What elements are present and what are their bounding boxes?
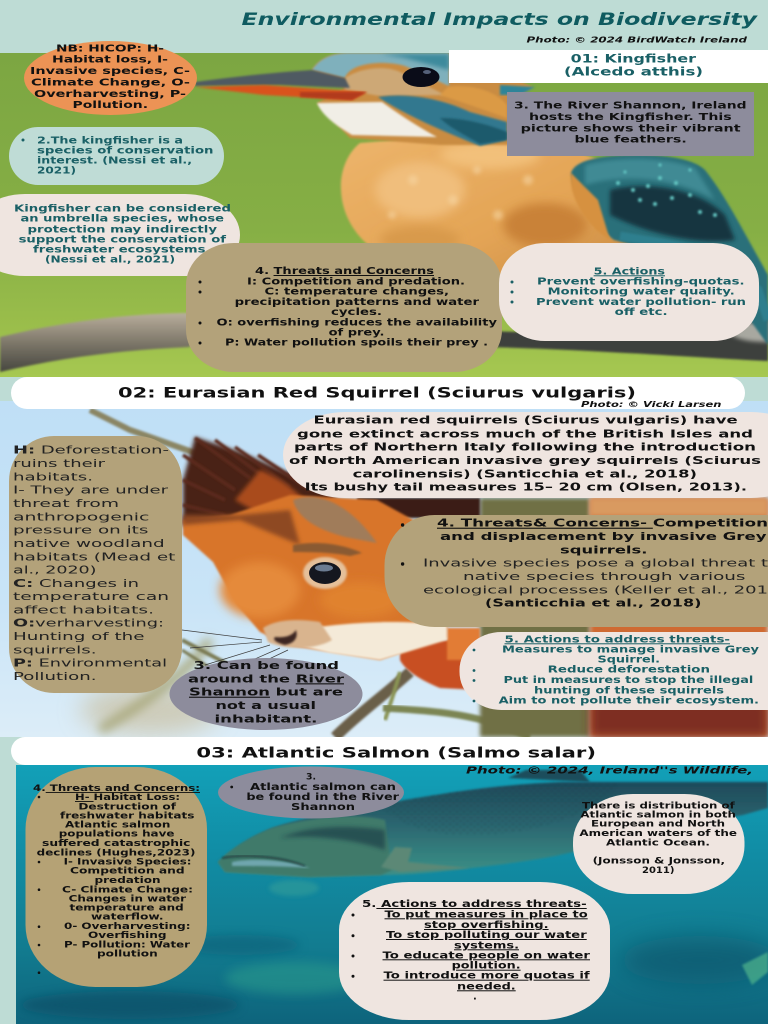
panel: River Shannon kingfisher: blue feathers. <box>574 135 687 146</box>
panel: squirrel threats and concerns: (Santicchia et al., 2018) <box>485 597 701 610</box>
panel: umbrella species <box>0 194 240 276</box>
panel: umbrella species: support the conservation of <box>19 235 227 246</box>
panel: umbrella species: protection may indirectly <box>28 224 218 235</box>
panel: kingfisher threats and concerns: of prey. <box>329 327 384 338</box>
panel: kingfisher conservation interest: species of conservation <box>37 145 214 156</box>
panel: squirrel threats and concerns: native species through various <box>463 570 746 583</box>
panel: salmon threats and concerns: temperature and <box>70 903 184 913</box>
heading: kingfisher: (Alcedo atthis) <box>564 64 703 78</box>
panel: squirrel threats and concerns: and displacement by invasive Grey <box>440 530 766 543</box>
heading: squirrel <box>11 377 745 409</box>
panel: salmon actions: To educate people on water <box>382 950 590 961</box>
panel: salmon threats and concerns: Atlantic salmon <box>65 821 170 831</box>
panel: River Shannon kingfisher: 3. The River Shannon, Ireland <box>514 101 746 112</box>
photo: kingfisher on branch <box>0 53 768 377</box>
panel: kingfisher threats and concerns: P: Water pollution spoils their prey . <box>225 338 488 349</box>
panel: kingfisher threats and concerns: cycles. <box>331 307 382 318</box>
panel: salmon actions: . <box>473 991 477 1002</box>
panel: salmon actions: To introduce more quotas if <box>384 971 591 982</box>
photo credit: kingfisher: Photo: © 2024 BirdWatch Ireland <box>526 36 747 45</box>
panel: squirrel extinction facts: Eurasian red squirrels (Sciurus vulgaris) have <box>314 414 738 427</box>
panel: squirrel HICOP list: threat from <box>13 497 119 510</box>
panel: salmon distribution: American waters of the <box>579 829 737 839</box>
photo: red squirrel <box>0 401 768 737</box>
panel: salmon actions <box>339 882 610 1020</box>
panel: kingfisher actions: 5. Actions <box>594 266 665 277</box>
panel: HICOP note: Overharvesting, P- <box>34 89 186 100</box>
panel: River Shannon kingfisher: picture shows their vibrant <box>521 124 741 135</box>
panel: salmon threats and concerns: waterflow. <box>91 913 164 923</box>
panel: salmon distribution: 2011) <box>642 866 674 876</box>
panel: squirrel actions: Put in measures to stop the illegal <box>504 675 753 686</box>
panel: salmon actions: stop overfishing. <box>424 920 549 931</box>
panel: squirrel HICOP list: P: Environmental <box>13 657 167 670</box>
panel: squirrel HICOP list: O: verharvesting: <box>13 617 164 630</box>
panel: squirrel HICOP list: al., 2020) <box>13 564 96 577</box>
panel: salmon threats and concerns: I- Invasive Species: <box>64 857 192 867</box>
panel: squirrel River Shannon: around the River <box>188 672 345 685</box>
panel: salmon threats and concerns: declines (Hughes,2023) <box>37 848 195 858</box>
panel: HICOP note: NB: HICOP: H- <box>56 44 164 55</box>
panel: salmon threats and concerns: Competition and <box>70 867 185 877</box>
panel: squirrel actions: Reduce deforestation <box>548 665 710 676</box>
panel: kingfisher threats and concerns: O: overfishing reduces the availability <box>216 317 498 328</box>
panel: salmon threats and concerns: C- Climate Change: <box>62 885 193 895</box>
panel: umbrella species: an umbrella species, whose <box>20 214 224 225</box>
panel: squirrel River Shannon <box>170 658 362 730</box>
panel: squirrel extinction facts: carolinensis) (Santicchia et al., 2018) <box>353 467 697 480</box>
panel: kingfisher threats and concerns: C: temperature changes, <box>264 287 449 298</box>
panel: kingfisher threats and concerns: I: Competition and predation. <box>247 276 465 287</box>
panel: squirrel HICOP list: temperature can <box>13 590 169 603</box>
panel: salmon threats and concerns <box>26 767 207 987</box>
photo: Atlantic salmon underwater <box>16 765 768 1024</box>
heading: squirrel: 02: Eurasian Red Squirrel (Sciurus vulgaris) <box>118 385 636 401</box>
panel: squirrel extinction facts: parts of Northern Italy following the introduction <box>294 441 756 454</box>
panel: salmon River Shannon: Shannon <box>291 802 355 813</box>
panel: umbrella species: freshwater ecosystems. <box>33 245 210 256</box>
panel: salmon River Shannon: 3. <box>306 772 316 782</box>
panel: kingfisher conservation interest: 2.The kingfisher is a <box>37 135 183 146</box>
panel: HICOP note: Climate Change, O- <box>31 78 190 89</box>
panel: kingfisher actions <box>499 243 759 341</box>
panel: salmon threats and concerns: predation <box>94 876 161 886</box>
panel: squirrel extinction facts: gone extinct across much of the British Isles and <box>297 427 753 440</box>
panel: squirrel HICOP list: H: Deforestation- <box>13 444 169 457</box>
panel: kingfisher actions: Prevent overfishing-quotas. <box>537 276 744 287</box>
panel: squirrel HICOP list: I- They are under <box>13 484 169 497</box>
panel: squirrel actions: hunting of these squirrels <box>534 685 724 696</box>
panel: squirrel extinction facts: of North American invasive grey squirrels (Sciurus <box>289 454 762 467</box>
panel: HICOP note: Pollution. <box>72 100 148 111</box>
panel: squirrel actions: Aim to not pollute their ecosystem. <box>499 695 759 706</box>
panel: squirrel HICOP list: squirrels. <box>13 643 96 656</box>
panel: salmon threats and concerns: populations have <box>59 830 174 840</box>
panel: kingfisher threats and concerns: precipitation patterns and water <box>235 297 479 308</box>
heading: kingfisher: 01: Kingfisher <box>571 51 696 65</box>
panel: squirrel HICOP list: pressure on its <box>13 524 149 537</box>
heading: salmon <box>11 737 768 765</box>
panel: salmon actions: needed. <box>457 981 516 992</box>
panel: squirrel River Shannon: Shannon but are <box>189 686 343 699</box>
panel: squirrel threats and concerns: Invasive species pose a global threat t <box>423 557 768 570</box>
panel: squirrel HICOP list <box>9 436 182 693</box>
panel: squirrel HICOP list: affect habitats. <box>13 603 154 616</box>
panel: kingfisher actions: Prevent water pollution- run <box>536 297 746 308</box>
panel: HICOP note <box>24 41 197 115</box>
panel: salmon threats and concerns: Changes in water <box>69 894 187 904</box>
panel: squirrel actions: 5. Actions to address threats- <box>504 634 730 645</box>
panel: salmon distribution: Atlantic Ocean. <box>606 838 710 848</box>
panel: River Shannon kingfisher: hosts the Kingfisher. This <box>529 112 732 123</box>
panel: salmon distribution: European and North <box>591 820 725 830</box>
panel: kingfisher actions: off etc. <box>615 307 668 318</box>
panel: squirrel threats and concerns: 4. Threats& Concerns- Competition <box>437 517 768 530</box>
panel: squirrel HICOP list: anthropogenic <box>13 510 149 523</box>
panel: salmon actions: To put measures in place to <box>384 909 588 920</box>
panel: kingfisher conservation interest: interest. (Nessi et al., <box>37 156 192 167</box>
panel: squirrel threats and concerns <box>384 515 768 627</box>
band behind squirrel heading <box>0 386 768 401</box>
panel: salmon distribution: There is distribution of <box>582 801 735 811</box>
title: Environmental Impacts on Biodiversity <box>242 10 758 30</box>
heading: kingfisher <box>449 50 768 83</box>
photo credit: salmon: Photo: © 2024, Ireland''s Wildlife, <box>466 765 753 776</box>
panel: squirrel HICOP list: Hunting of the <box>13 630 145 643</box>
panel: squirrel actions: Measures to manage invasive Grey <box>502 644 760 655</box>
panel: squirrel HICOP list: C: Changes in <box>13 577 139 590</box>
panel: salmon threats and concerns: P- Pollution: Water <box>64 940 191 950</box>
photo credit: squirrel: Photo: © Vicki Larsen <box>581 400 722 409</box>
panel: HICOP note: Habitat loss, I- <box>52 55 168 66</box>
panel: salmon threats and concerns: Overfishing <box>88 931 166 941</box>
panel: squirrel HICOP list: habitats (Mead et <box>13 550 177 563</box>
panel: squirrel HICOP list: Pollution. <box>13 670 96 683</box>
top band <box>0 0 768 53</box>
panel: squirrel actions <box>460 632 768 710</box>
panel: salmon threats and concerns: suffered catastrophic <box>42 839 190 849</box>
panel: squirrel River Shannon: inhabitant. <box>214 712 317 725</box>
panel: salmon threats and concerns: pollution <box>97 950 158 960</box>
panel: salmon actions: 5. Actions to address threats- <box>362 899 587 910</box>
panel: salmon actions: To stop polluting our water <box>386 930 587 941</box>
panel: squirrel extinction facts: Its bushy tail measures 15– 20 cm (Olsen, 2013). <box>305 481 747 494</box>
panel: salmon actions: pollution. <box>452 961 521 972</box>
panel: umbrella species: Kingfisher can be considered <box>14 204 231 215</box>
panel: salmon distribution <box>573 794 744 894</box>
panel: kingfisher threats and concerns <box>186 243 502 372</box>
panel: umbrella species: (Nessi et al., 2021) <box>45 255 175 266</box>
heading: salmon: 03: Atlantic Salmon (Salmo salar) <box>196 745 596 761</box>
panel: salmon River Shannon: Atlantic salmon can <box>250 782 396 793</box>
panel: salmon threats and concerns: 0- Overharvesting: <box>64 922 190 932</box>
panel: kingfisher threats and concerns: 4. Threats and Concerns <box>255 266 434 277</box>
panel: HICOP note: Invasive species, C- <box>30 66 190 77</box>
panel: salmon threats and concerns: freshwater habitats <box>60 811 194 821</box>
panel: squirrel HICOP list: native woodland <box>13 537 165 550</box>
panel: squirrel threats and concerns: ecological processes (Keller et al., 201 <box>423 583 768 596</box>
panel: salmon threats and concerns: Destruction of <box>78 802 176 812</box>
panel: kingfisher conservation interest <box>9 127 224 185</box>
panel: kingfisher actions: Monitoring water quality. <box>548 287 735 298</box>
panel: squirrel extinction facts <box>283 412 768 498</box>
panel: salmon River Shannon: be found in the River <box>246 792 399 803</box>
panel: squirrel HICOP list: ruins their <box>13 457 106 470</box>
panel: salmon distribution: (Jonsson & Jonsson, <box>593 856 725 866</box>
panel: salmon threats and concerns: 4. Threats and Concerns: <box>33 784 200 794</box>
panel: River Shannon kingfisher <box>507 92 754 156</box>
panel: salmon threats and concerns: H- Habitat Loss: <box>75 793 180 803</box>
panel: squirrel actions: Squirrel. <box>598 655 660 666</box>
panel: squirrel River Shannon: not a usual <box>216 699 316 712</box>
panel: squirrel River Shannon: 3. Can be found <box>194 659 339 672</box>
panel: salmon actions: systems. <box>454 940 519 951</box>
panel: squirrel HICOP list: habitats. <box>13 470 93 483</box>
panel: squirrel threats and concerns: squirrels. <box>560 543 648 556</box>
panel: salmon distribution: Atlantic salmon in both <box>580 810 736 820</box>
panel: kingfisher conservation interest: 2021) <box>37 166 76 177</box>
panel: salmon River Shannon <box>218 766 404 818</box>
